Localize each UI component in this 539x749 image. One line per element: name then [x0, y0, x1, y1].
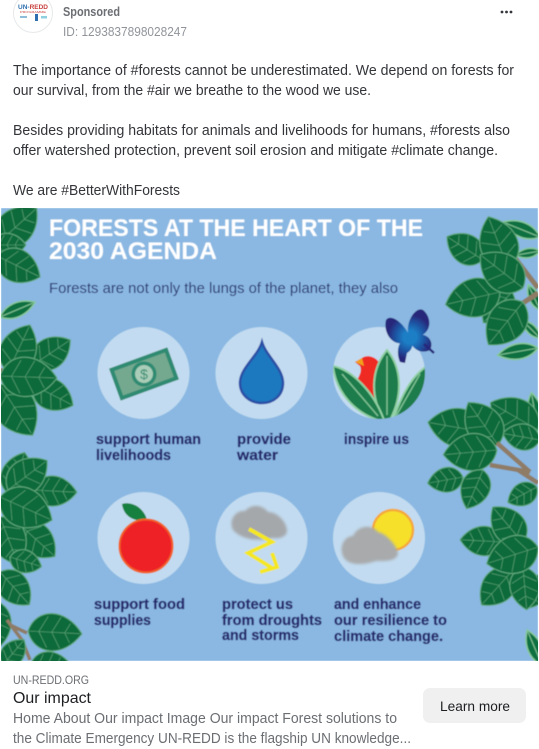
link description: Home About Our impact Image Our impact Forest solutions to	[13, 711, 397, 727]
label: protect us	[222, 597, 293, 613]
logo: UN-REDD: UN-REDD	[18, 4, 48, 11]
label: water	[236, 448, 278, 464]
icon: banknote: $	[140, 366, 148, 382]
infographic image	[0, 195, 539, 681]
label	[94, 597, 185, 629]
sponsored label: Sponsored	[63, 5, 120, 19]
label	[334, 597, 447, 645]
label: our resilience to	[334, 613, 447, 629]
post body text: Besides providing habitats for animals and livelihoods for humans, #forests also	[13, 123, 510, 139]
item: protect from droughts and storms	[216, 492, 322, 644]
label: livelihoods	[96, 448, 171, 464]
icon: storm cloud	[231, 506, 287, 540]
label: from droughts	[222, 613, 322, 629]
logo: UN-REDD: PROGRAMME	[20, 10, 46, 14]
post body text	[13, 63, 514, 199]
label: provide	[237, 432, 291, 448]
item: support food supplies	[94, 492, 190, 629]
left foliage	[0, 195, 83, 681]
icon: sun	[373, 510, 413, 550]
link description	[13, 711, 411, 747]
source domain: UN-REDD.ORG	[13, 673, 89, 687]
ad id: ID: 1293837898028247	[63, 25, 187, 39]
item: provide water	[216, 327, 308, 464]
heading: FORESTS AT THE HEART OF THE	[49, 215, 423, 242]
icon: cloud	[342, 527, 398, 564]
label: supplies	[94, 613, 151, 629]
icon: lightning bolt	[248, 529, 277, 572]
label: inspire us	[344, 432, 409, 448]
link description: the Climate Emergency UN-REDD is the flagship UN knowledge...	[13, 731, 411, 747]
icon: red bird and plant	[333, 350, 427, 420]
icon: butterfly	[385, 309, 434, 363]
label: climate change.	[334, 629, 443, 645]
label: support food	[94, 597, 185, 613]
label	[222, 597, 322, 644]
subtitle: Forests are not only the lungs of the planet, they also	[49, 280, 398, 297]
post body text: offer watershed protection, prevent soil erosion and mitigate #climate change.	[13, 143, 498, 159]
item: inspire us	[333, 309, 434, 448]
post body text: We are #BetterWithForests	[13, 183, 180, 199]
post header	[14, 0, 512, 39]
learn more button	[423, 688, 526, 723]
item: support human livelihoods	[96, 327, 201, 464]
icon: water drop	[240, 342, 283, 403]
label: support human	[96, 432, 201, 448]
heading	[49, 218, 423, 260]
label: and storms	[222, 628, 299, 644]
label	[236, 432, 291, 464]
heading: 2030 AGENDA	[49, 238, 217, 265]
icon: apple	[120, 503, 172, 572]
logo: UN-REDD	[14, 0, 52, 32]
post body text: The importance of #forests cannot be underestimated. We depend on forests for	[13, 63, 514, 79]
label: and enhance	[334, 597, 421, 613]
icon: more menu	[501, 11, 512, 13]
label	[96, 432, 201, 464]
learn more button: Learn more	[440, 698, 510, 714]
item: enhance resilience	[333, 492, 447, 645]
link preview footer	[13, 673, 526, 747]
link title: Our impact	[13, 690, 92, 707]
right foliage	[424, 210, 539, 668]
post body text: our survival, from the #air we breathe to the wood we use.	[13, 83, 371, 99]
